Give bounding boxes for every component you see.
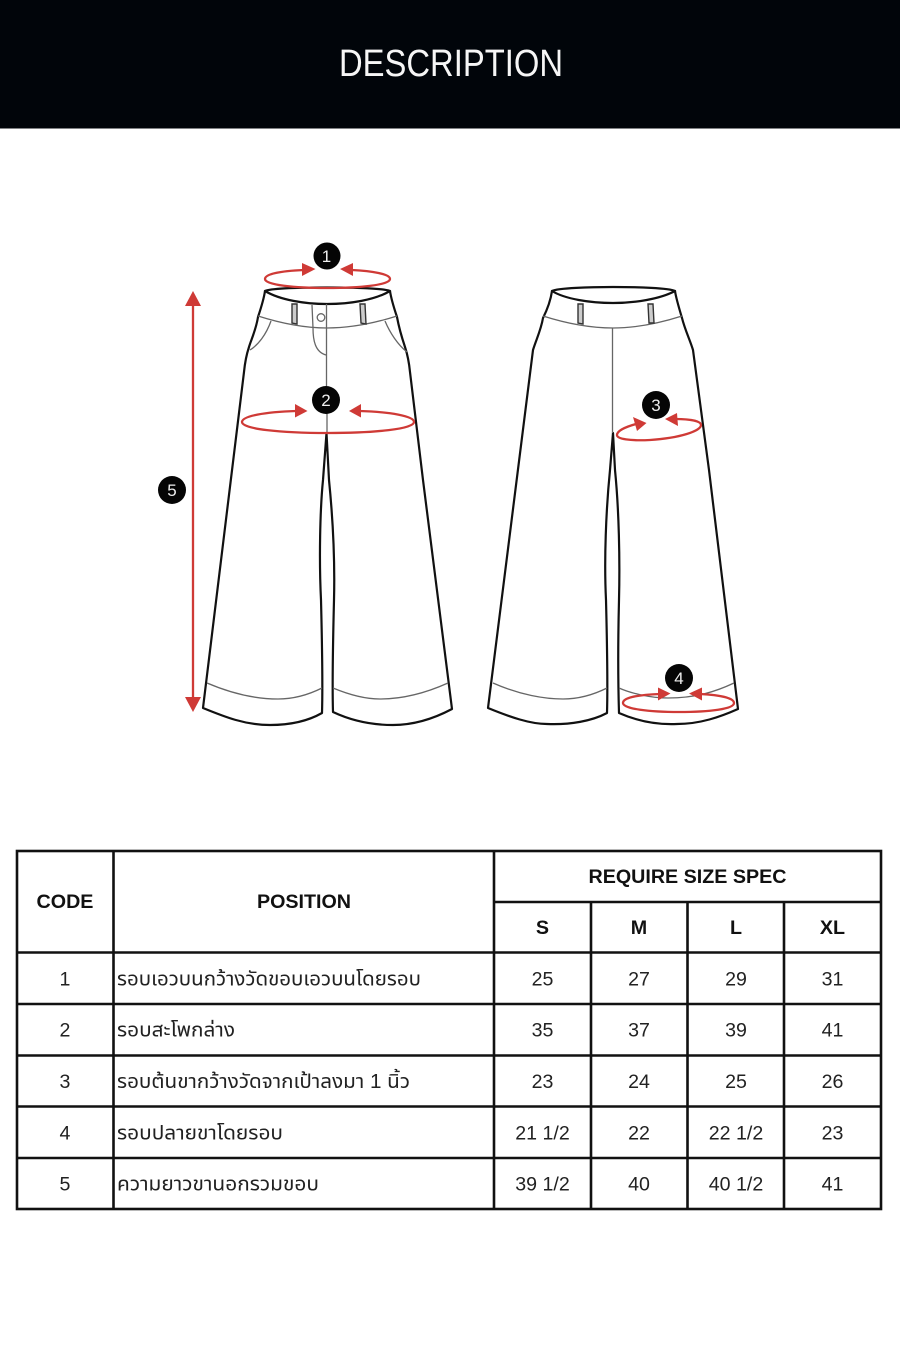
row 3: 26	[822, 1071, 843, 1093]
measurement 4: hem	[623, 664, 734, 712]
row 4: 21 1/2	[515, 1122, 570, 1144]
row 2	[60, 1018, 843, 1042]
title: DESCRIPTION	[339, 43, 563, 85]
row 1: รอบเอวบนกว้างวัดขอบเอวบนโดยรอบ	[117, 968, 421, 990]
row 4	[60, 1122, 843, 1144]
row 2: 37	[628, 1020, 650, 1042]
row 3: 23	[532, 1071, 553, 1093]
row 4: 22 1/2	[709, 1122, 763, 1144]
table header: POSITION	[257, 891, 351, 913]
row 3: 24	[628, 1071, 650, 1093]
row 5: 40 1/2	[709, 1174, 763, 1196]
row 4: 4	[60, 1122, 71, 1144]
measurement 5: length: 5	[167, 481, 177, 500]
row 1: 1	[60, 968, 70, 990]
row 1: 29	[725, 968, 747, 990]
table header: REQUIRE SIZE SPEC	[588, 866, 787, 888]
row 3: รอบต้นขากว้างวัดจากเป้าลงมา 1 นิ้ว	[117, 1068, 410, 1093]
table header: L	[730, 917, 742, 939]
back view of trousers	[488, 287, 738, 724]
measurement 5: length	[158, 291, 201, 712]
measurement 1: waist	[265, 242, 390, 288]
row 2: 39	[725, 1020, 747, 1042]
row 1	[60, 968, 843, 990]
header band	[0, 0, 900, 128]
row 5: 40	[628, 1174, 650, 1196]
measurement 2: hip: 2	[321, 391, 331, 410]
table header	[37, 866, 845, 939]
row 2: รอบสะโพกล่าง	[117, 1018, 235, 1042]
table header: S	[536, 917, 549, 939]
row 5: 5	[60, 1174, 71, 1196]
row 4: 22	[628, 1122, 650, 1144]
row 1: 27	[628, 968, 650, 990]
row 5	[60, 1174, 843, 1196]
row 2: 2	[60, 1020, 70, 1042]
row 3: 25	[725, 1071, 747, 1093]
row 5: 41	[822, 1174, 843, 1196]
row 5: ความยาวขานอกรวมขอบ	[117, 1174, 319, 1196]
row 3: 3	[60, 1071, 71, 1093]
table header: CODE	[37, 891, 93, 913]
row 2: 41	[822, 1020, 843, 1042]
row 1: 31	[822, 968, 843, 990]
front view of trousers	[203, 288, 452, 725]
row 1: 25	[532, 968, 553, 990]
measurement 2: hip	[242, 386, 414, 433]
measurement 1: waist: 1	[322, 247, 331, 266]
row 4: รอบปลายขาโดยรอบ	[117, 1122, 283, 1144]
size spec table	[17, 851, 881, 1209]
row 3	[60, 1068, 843, 1093]
table header: M	[631, 917, 647, 939]
measurement 4: hem: 4	[674, 669, 684, 688]
row 5: 39 1/2	[515, 1174, 570, 1196]
table grid	[17, 851, 881, 1209]
table header: XL	[820, 917, 845, 939]
row 2: 35	[532, 1020, 553, 1042]
measurement 3: thigh	[617, 391, 701, 440]
measurement 3: thigh: 3	[651, 396, 661, 415]
row 4: 23	[822, 1122, 843, 1144]
